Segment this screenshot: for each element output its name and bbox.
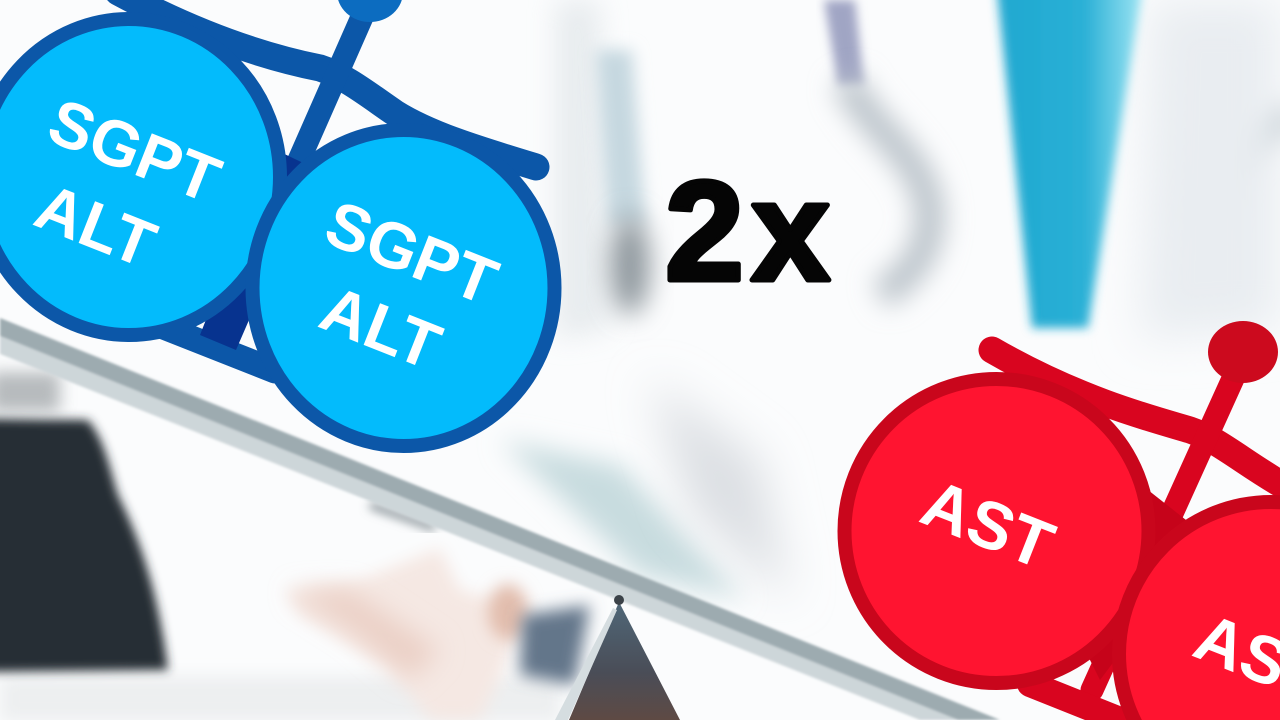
label disc two: SGPT bbox=[316, 186, 507, 319]
blue dumbbell weight: SGPT ALT bbox=[0, 0, 554, 446]
blue disc two bbox=[252, 130, 554, 446]
red dumbbell weight: AST bbox=[844, 321, 1280, 720]
headline multiplier: x bbox=[751, 152, 830, 311]
red disc two bbox=[1119, 502, 1280, 720]
headline multiplier bbox=[665, 152, 830, 311]
blurred hand bbox=[284, 548, 525, 720]
blue disc one bbox=[0, 19, 280, 335]
blue dumbbell weight: SGPT ALT: ALT bbox=[311, 271, 451, 384]
blue handle bbox=[118, 0, 536, 371]
seesaw fulcrum bbox=[555, 595, 680, 720]
blue dumbbell weight: SGPT ALT: ALT bbox=[26, 169, 166, 282]
seesaw beam bbox=[0, 318, 1000, 720]
label disc one: SGPT bbox=[39, 84, 230, 217]
label disc one: AST bbox=[912, 465, 1064, 584]
blurred teal necktie bbox=[996, 0, 1144, 328]
blurred dark sleeve bbox=[0, 418, 168, 672]
headline multiplier: 2 bbox=[665, 152, 744, 311]
red handle bbox=[992, 350, 1280, 720]
red disc one bbox=[844, 379, 1148, 683]
